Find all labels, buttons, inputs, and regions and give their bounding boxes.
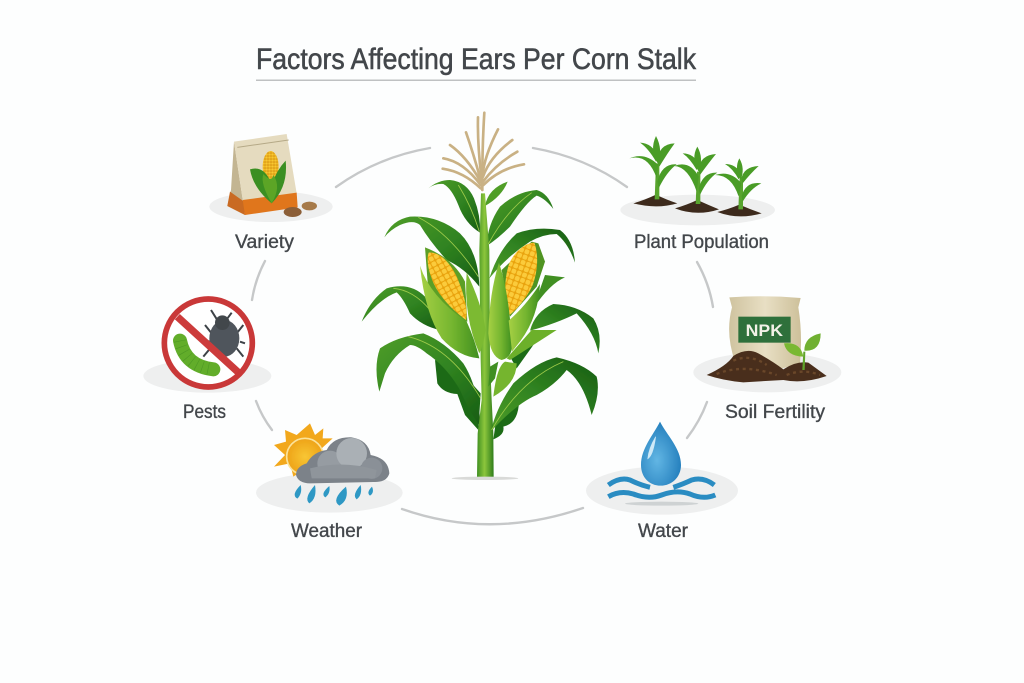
leaves behind the stalk [362,180,600,439]
pests shadow [143,359,271,393]
icon: sun [274,423,333,477]
icon: fertilizer bag: NPK [746,321,783,340]
icon: fertilizer bag [729,296,801,370]
icon: no pests sign [164,299,252,387]
factor labels [183,232,826,542]
label: weather: Weather [291,521,363,542]
factors right side [586,136,841,515]
icon: drop highlight [647,437,656,459]
tassel [443,113,524,190]
connecting ring arcs [252,148,713,524]
label: water: Water [638,521,689,542]
factor: weather [256,423,403,513]
left ear [420,247,486,358]
right ear [488,242,545,360]
central corn plant [362,113,600,480]
stalk [477,193,494,477]
plant population shadow [620,195,775,225]
icon: sprout [784,333,821,370]
factor: pests [143,299,271,393]
icon: seedlings [629,136,761,209]
title: Factors Affecting Ears Per Corn Stalk [256,43,697,76]
water shadow [586,467,738,515]
weather shadow [256,473,403,513]
leaf midribs [393,185,563,430]
ground shadow [452,477,518,480]
factor: plant population [620,136,775,225]
icon: seed bag [227,134,317,217]
icon: waves [608,479,715,497]
label: soil fertility: Soil Fertility [725,402,826,423]
water reflection [625,502,698,506]
label: pests: Pests [183,402,226,423]
variety shadow [209,191,333,222]
factor: water [586,422,738,515]
soil fertility shadow [693,352,841,392]
factor: soil fertility [693,296,841,392]
icon: raindrops [295,485,373,506]
label: plant population: Plant Population [634,232,769,253]
label: variety: Variety [235,232,294,253]
icon: water drop [641,422,681,486]
lower small shoot [488,330,557,397]
title underline [256,80,696,81]
factor: variety [209,134,333,222]
icon: sun disc [287,438,323,475]
icon: soil mounds [633,195,762,216]
icon: storm cloud [296,437,389,483]
icon: soil pile [707,351,827,382]
factors left side [143,134,403,513]
